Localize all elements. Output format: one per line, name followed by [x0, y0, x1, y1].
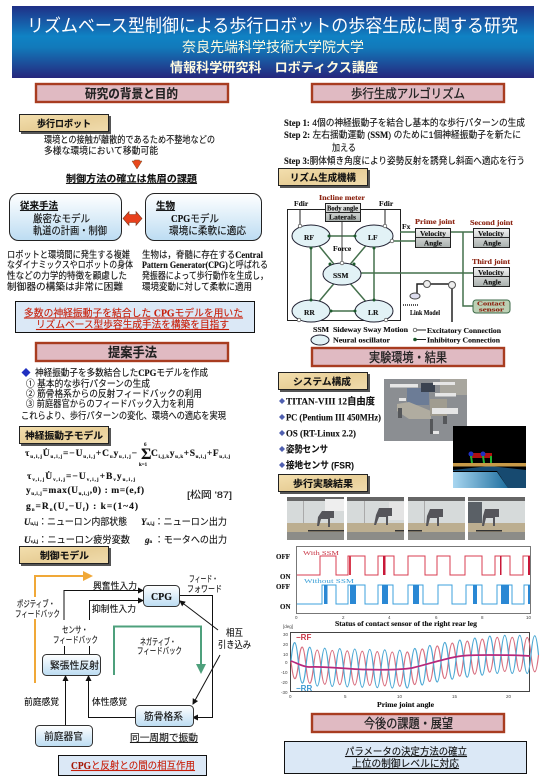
- label: sensor feedback: フィードバック: [53, 635, 98, 645]
- joint: third: [472, 257, 511, 286]
- list: system specs: 姿勢センサ: [286, 444, 328, 456]
- issue statement: 制御方法の確立は焦眉の課題: [66, 173, 198, 185]
- equations: +C: [96, 449, 109, 459]
- text block: biological CPG: 環境変動に対して柔軟に適用: [142, 281, 252, 293]
- series: without SSM: [297, 578, 530, 604]
- oscillator: SSM: [323, 263, 361, 285]
- callout: CPG reflex interaction: CPGと反射との間の相互作用: [71, 759, 195, 772]
- text block: proposed method: ② 筋骨格系からの反射フィードバックの利用: [26, 388, 202, 400]
- joint: third: Angle: [483, 278, 502, 286]
- heading: background and purpose: 研究の背景と目的: [85, 86, 178, 101]
- arrow: negative feedback: [114, 626, 201, 675]
- heading: rhythm generation mechanism: [278, 168, 370, 188]
- heading: system configuration: システム構成: [293, 376, 352, 388]
- text block: steps: [284, 117, 525, 167]
- label: force: Force: [333, 244, 352, 253]
- label: mutual entrainment: 引き込み: [218, 640, 251, 651]
- heading: walking experiment results: [278, 474, 370, 494]
- equations: v,i,j: [32, 478, 45, 483]
- oscillator: LF: [355, 225, 393, 247]
- legend: variables: gn ：モータへの出力: [144, 534, 227, 546]
- text block: steps: Step 3:胴体傾き角度により姿勢反射を誘発し斜面へ適応を行う: [284, 155, 525, 167]
- equations: u,i,j: [119, 455, 131, 460]
- equations: y: [113, 449, 118, 459]
- arrow: entrainment to musculoskeletal: [193, 655, 220, 704]
- heading: experiment and results: [312, 348, 504, 366]
- equations: =−U: [63, 449, 83, 459]
- box: tonic reflex: [42, 654, 100, 676]
- arrow: down: [132, 160, 142, 169]
- arrow: feed forward: [180, 596, 212, 718]
- label: sensor feedback: [53, 625, 98, 645]
- equations: u,i,j: [219, 455, 230, 460]
- y axis labels: -20: [281, 680, 288, 685]
- equations: τ: [25, 449, 29, 459]
- text block: steps: 加える: [332, 143, 356, 154]
- x axis ticks: [289, 694, 512, 699]
- series: RF wave: [291, 637, 538, 686]
- panel: conventional method: 軌道の計画・制御: [33, 224, 107, 237]
- text block: steps: Step 2: 左右揺動運動 (SSM) のために1個神経振動子を新たに: [284, 129, 521, 141]
- panel: biology: CPGモデル: [171, 212, 219, 225]
- joint: third: Velocity: [478, 268, 504, 277]
- oscillator: LR: [355, 300, 393, 322]
- equations: y: [170, 449, 175, 459]
- series: body center: [291, 655, 530, 670]
- text block: conventional limits: [7, 249, 133, 293]
- equations: [25, 443, 230, 513]
- equations: U̇: [43, 446, 50, 459]
- list: system specs: PC (Pentium III 450MHz): [286, 412, 381, 424]
- box: vestibular organ: [36, 726, 92, 746]
- sensor: contact: Contact: [477, 302, 505, 308]
- list: system specs: TITAN-VIII 12自由度: [286, 396, 375, 408]
- equations: +B: [100, 472, 113, 482]
- equations: y: [26, 486, 31, 496]
- oscillator: LF: LF: [368, 233, 378, 242]
- panel: biology: [146, 194, 262, 240]
- joint: prime: Velocity: [420, 229, 446, 238]
- y axis labels: [281, 624, 293, 695]
- heading: walking robot: [20, 114, 111, 134]
- text block: walking robot: 環境との接触が離散的であるため不整地などの: [44, 134, 215, 146]
- x axis ticks: 20: [506, 694, 512, 699]
- label: negative feedback: フィードバック: [137, 646, 182, 656]
- heading: background and purpose: [36, 84, 228, 102]
- joint: second: [470, 218, 514, 248]
- axis labels: [276, 553, 290, 611]
- text block: walking robot: 多様な環境において移動可能: [44, 145, 158, 157]
- equations: 6: [144, 443, 147, 448]
- axis labels: ON: [280, 573, 290, 581]
- photo 2: [347, 497, 404, 540]
- equations: Σ: [141, 446, 151, 463]
- x axis ticks: [295, 615, 532, 620]
- arrow: entrainment to CPG: [180, 601, 218, 630]
- equations: y: [117, 472, 122, 482]
- box: vestibular organ: 前庭器官: [44, 730, 83, 743]
- text block: conventional limits: なダイナミックスやロボットの身体: [7, 259, 133, 271]
- text block: proposed method: [21, 367, 226, 422]
- panel: conventional method: 厳密なモデル: [33, 212, 90, 225]
- equations: u,i,j: [31, 492, 42, 497]
- equations: (U: [53, 501, 65, 512]
- sensor: inclination: [319, 193, 366, 222]
- y axis labels: 20: [283, 642, 289, 647]
- equations: ,0) : m=(e,f): [90, 485, 144, 496]
- box: musculoskeletal system: 筋骨格系: [144, 710, 183, 723]
- arrow: inhibitory input: [90, 600, 143, 620]
- equations: u,i,j: [83, 455, 95, 460]
- equations: v: [113, 478, 116, 483]
- list: system specs: OS (RT-Linux 2.2): [286, 428, 356, 440]
- oscillator: RR: RR: [304, 308, 315, 317]
- link model: [403, 280, 456, 322]
- panel: conventional method: 従来手法: [20, 200, 58, 212]
- department: 情報科学研究科 ロボティクス講座: [170, 60, 378, 75]
- list: system specs: 接地センサ (FSR): [286, 460, 354, 472]
- text block: proposed method: 神経振動子を多数結合したCPGモデルを作成: [35, 367, 208, 379]
- x axis ticks: 0: [289, 694, 292, 699]
- heading: control model: [20, 546, 111, 566]
- oscillator: RF: RF: [304, 233, 314, 242]
- oscillator: SSM: SSM: [333, 271, 348, 280]
- y axis labels: -10: [281, 670, 288, 675]
- chart caption: prime joint: Prime joint angle: [377, 700, 435, 709]
- arrow: positive feedback: [35, 576, 91, 683]
- sensor: inclination: Incline meter: [319, 193, 366, 202]
- text block: biological CPG: 生物は，脊髄に存在するCentral: [142, 249, 263, 261]
- equations: u,i,j: [50, 455, 63, 460]
- text block: conventional limits: ロボットと環境間に発生する複雑: [7, 249, 130, 261]
- sensor: inclination: Body angle: [327, 204, 359, 212]
- y axis labels: -30: [281, 690, 288, 695]
- joint: prime: [415, 217, 456, 248]
- equations: =max(U: [42, 485, 78, 496]
- legend: Neural oscillator: [333, 336, 391, 344]
- series: with SSM: With SSM: [303, 550, 339, 557]
- x axis ticks: 0: [295, 615, 298, 620]
- heading: experiment and results: 実験環境・結果: [369, 350, 447, 365]
- legend: Sideway Sway Motion: [333, 325, 409, 334]
- photo 3: [408, 497, 465, 540]
- network connections: [300, 209, 473, 311]
- x axis ticks: 10: [526, 615, 532, 620]
- label: foot right: Fdir: [379, 199, 394, 208]
- callout: goal: リズムベース型歩容生成手法を構築を目指す: [36, 318, 229, 331]
- joint: prime: Angle: [424, 238, 443, 248]
- legend: RF: −RF: [296, 633, 311, 642]
- equations: v,i,j: [87, 478, 99, 483]
- sensor: inclination: Laterals: [329, 212, 356, 222]
- label: same period: 同一周期で振動: [130, 732, 198, 744]
- y axis labels: [deg]: [283, 624, 293, 629]
- panel: future work: パラメータの決定方法の確立: [345, 745, 467, 758]
- title banner: [12, 6, 534, 78]
- inhibitory and excitatory dots: [297, 224, 394, 322]
- legend: [311, 325, 502, 345]
- text block: conventional limits: 制御器の構築は非常に困難: [7, 281, 123, 293]
- image: simulation: [453, 426, 526, 488]
- panel: conventional method: [10, 194, 122, 240]
- axis labels: OFF: [276, 553, 290, 561]
- y axis labels: 30: [283, 632, 289, 637]
- heading: neural oscillator model: [20, 426, 111, 446]
- equations: k=1: [139, 463, 148, 468]
- label: feed forward: フォワード: [187, 584, 222, 594]
- x axis ticks: 4: [388, 615, 391, 620]
- text block: biological CPG: Pattern Generator(CPG)と呼ばれる: [142, 260, 268, 271]
- x axis ticks: 5: [344, 694, 347, 699]
- equations: u,k: [175, 455, 183, 460]
- series: without SSM: Without SSM: [304, 578, 354, 585]
- x axis ticks: 8: [481, 615, 484, 620]
- x axis ticks: 15: [452, 694, 458, 699]
- photo strip: walking experiment: [287, 497, 525, 540]
- joint: second: Second joint: [470, 218, 514, 227]
- legend: Inhibitory Connection: [427, 336, 501, 344]
- arrow: excitatory input: [64, 590, 143, 620]
- equations: C: [151, 449, 158, 459]
- text block: biological CPG: 発振器によって歩行動作を生成し，: [142, 270, 268, 282]
- label: feed forward: [187, 574, 222, 594]
- label: somatic sense: 体性感覚: [92, 696, 127, 707]
- photo 1: [287, 497, 344, 540]
- label: mutual entrainment: 相互: [226, 627, 243, 639]
- oscillator: LR: LR: [368, 308, 379, 317]
- photo: robot: [384, 379, 467, 441]
- y axis labels: 0: [285, 660, 288, 665]
- equations: v,i,j: [53, 478, 65, 483]
- label: inhibitory input: 抑制性入力: [92, 603, 136, 614]
- label: foot: Fdir: [294, 199, 309, 208]
- label: sensor feedback: センサ・: [62, 625, 88, 635]
- link model: Link Model: [410, 308, 440, 317]
- panel: future work: 上位の制御レベルに対応: [352, 757, 459, 770]
- equations: +F: [207, 449, 219, 459]
- chart: contact sensor status: [276, 546, 532, 620]
- list: system specs: [279, 396, 381, 472]
- chart caption: contact sensor: Status of contact sensor of the right rear leg: [335, 619, 477, 628]
- equations: u,i,j: [123, 478, 135, 483]
- heading: walking experiment results: 歩行実験結果: [293, 478, 354, 490]
- box: CPG: CPG: [151, 592, 172, 603]
- photo 4: [468, 497, 525, 540]
- sensor: contact: [473, 300, 510, 314]
- joint: second: Velocity: [478, 229, 504, 238]
- box: CPG: [144, 586, 180, 606]
- arrow: double: [123, 212, 142, 226]
- box: tonic reflex: 緊張性反射: [50, 659, 99, 672]
- affiliation: 奈良先端科学技術大学院大学: [182, 39, 364, 55]
- panel: future work: [284, 742, 526, 774]
- oscillator: RF: [292, 225, 330, 247]
- panel: biology: 環境に柔軟に適応: [169, 224, 246, 237]
- x axis ticks: 10: [397, 694, 403, 699]
- equations: +S: [184, 449, 195, 459]
- label: mutual entrainment: [218, 627, 251, 651]
- equations: g: [26, 502, 31, 512]
- heading: neural oscillator model: 神経振動子モデル: [25, 430, 103, 442]
- equations: u,i,j: [30, 455, 42, 460]
- label: vestibular sense: 前庭感覚: [24, 696, 59, 707]
- equations: f: [83, 508, 85, 513]
- callout: goal: 多数の神経振動子を結合した CPGモデルを用いた: [24, 306, 243, 320]
- label: excitatory input: 興奮性入力: [93, 580, 137, 591]
- legend: variables: Yu,i,j：ニューロン出力: [141, 516, 227, 528]
- equations: i,j,k: [158, 455, 169, 460]
- label: positive feedback: ポジティブ・: [17, 598, 55, 609]
- axis labels: ON: [280, 603, 290, 611]
- text block: walking robot: [44, 134, 215, 157]
- equations: −U: [69, 502, 82, 512]
- legend: RR: −RR: [296, 684, 312, 693]
- heading: gait generation algorithm: 歩行生成アルゴリズム: [351, 86, 465, 101]
- heading: walking robot: 歩行ロボット: [37, 118, 91, 130]
- heading: future work: 今後の課題・展望: [364, 716, 453, 731]
- chart: prime joint angle: [281, 624, 538, 699]
- equations: =−U: [66, 472, 86, 482]
- equations: u,i,j: [196, 455, 207, 460]
- callout: goal: [16, 302, 254, 332]
- legend: variables: [24, 516, 227, 546]
- diagram: rhythm generator network: [288, 193, 514, 345]
- heading: gait generation algorithm: [312, 84, 504, 102]
- label: positive feedback: [14, 597, 60, 619]
- callout: CPG reflex interaction: [58, 756, 206, 776]
- equations: τ: [27, 472, 31, 482]
- equations: n: [32, 508, 35, 513]
- series: RR wave: [291, 635, 538, 688]
- y axis labels: 10: [283, 652, 289, 657]
- equations: =R: [35, 502, 49, 512]
- box: musculoskeletal system: [136, 706, 194, 726]
- joint: third: Third joint: [472, 257, 511, 266]
- citation: [松岡 '87]: [187, 489, 232, 501]
- label: positive feedback: フィードバック: [15, 609, 60, 619]
- text block: proposed method: ① 基本的な歩行パターンの生成: [26, 378, 150, 390]
- text block: conventional limits: 性などの力学的特徴を顧慮した: [7, 270, 127, 282]
- text block: proposed method: ③ 前庭器官からのフィードバック入力を利用: [26, 398, 194, 410]
- joint: second: Angle: [483, 238, 502, 248]
- heading: control model: 制御モデル: [40, 550, 89, 562]
- title: リズムベース型制御による歩行ロボットの歩容生成に関する研究: [27, 16, 518, 36]
- axis labels: OFF: [276, 583, 290, 591]
- text block: proposed method: これらより、歩行パターンの変化、環境への適応を実現: [21, 410, 226, 422]
- joint: prime: Prime joint: [415, 217, 456, 226]
- arrow: vestibular input: [64, 676, 66, 725]
- label: negative feedback: ネガティブ・: [140, 636, 176, 647]
- equations: U̇: [45, 469, 52, 482]
- label: feed forward: フィード・: [189, 574, 218, 584]
- equations: u: [110, 455, 113, 460]
- legend: SSM: [313, 325, 329, 334]
- series: with SSM: [297, 550, 530, 575]
- heading: rhythm generation mechanism: リズム生成機構: [290, 172, 356, 184]
- icon: diamond bullet: [22, 368, 30, 377]
- equations: e: [66, 508, 68, 513]
- heading: proposed method: [36, 343, 228, 361]
- arrow: somatic sense: [88, 676, 135, 718]
- text block: steps: Step 1: 4個の神経振動子を結合し基本的な歩行パターンの生成: [284, 117, 525, 129]
- diagram: control model: [14, 574, 251, 746]
- label: negative feedback: [137, 636, 182, 656]
- heading: system configuration: [278, 372, 370, 392]
- label: Fx: Fx: [402, 222, 411, 231]
- sensor: contact: sensor: [479, 308, 504, 314]
- x axis ticks: 6: [435, 615, 438, 620]
- equations: u,i,j: [79, 492, 89, 497]
- heading: future work: [312, 714, 504, 732]
- x axis ticks: 2: [342, 615, 345, 620]
- text block: biological CPG: [142, 249, 268, 293]
- equations: −: [132, 449, 137, 459]
- heading: proposed method: 提案手法: [108, 345, 157, 360]
- frame: [288, 210, 400, 320]
- legend: variables: Uv,i,j：ニューロン疲労変数: [24, 534, 130, 546]
- legend: Excitatory Connection: [427, 326, 502, 335]
- equations: ) : k=(1~4): [86, 501, 138, 512]
- legend: variables: Uu,i,j：ニューロン内部状態: [24, 516, 127, 528]
- panel: biology: 生物: [156, 200, 175, 212]
- equations: n: [50, 508, 53, 513]
- oscillator: RR: [292, 300, 330, 322]
